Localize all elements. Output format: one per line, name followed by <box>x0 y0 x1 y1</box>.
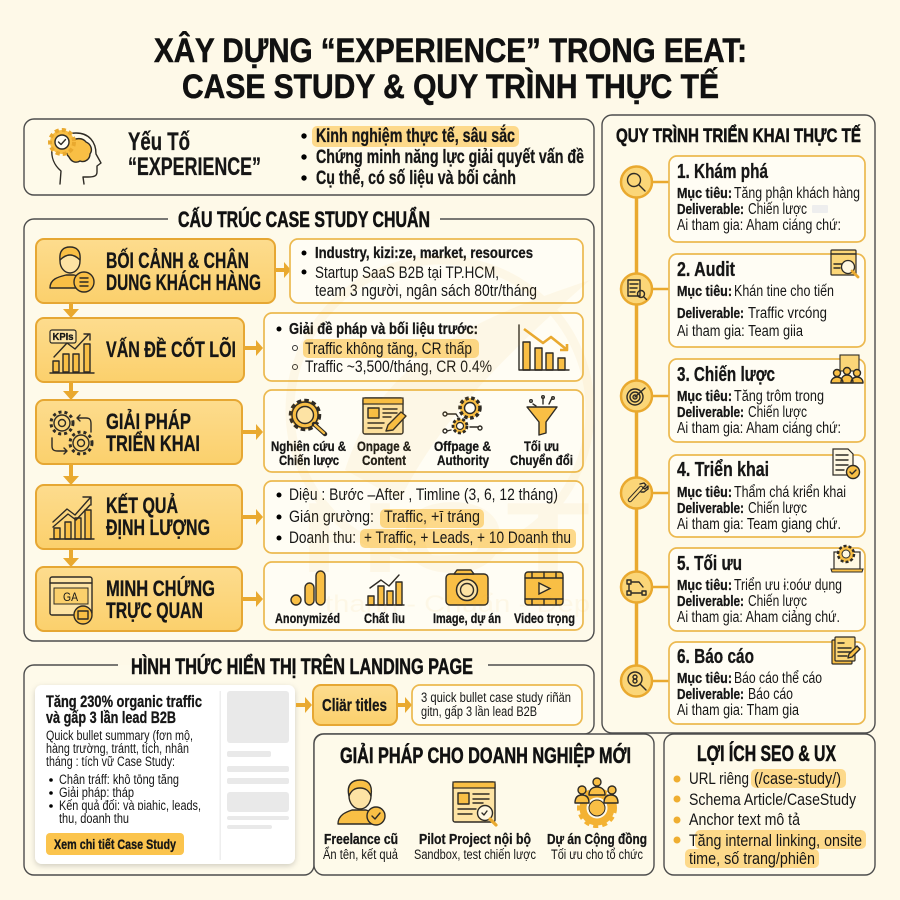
arrow <box>397 697 412 713</box>
icon: brain with gear <box>50 130 101 184</box>
title: CASE STUDY & QUY TRÌNH THỰC TẾ <box>182 68 719 106</box>
heading: landing page: HÌNH THỨC HIỂN THỊ TRÊN LANDING PAGE <box>131 654 473 679</box>
step card 5: Mục tiêu: <box>677 577 732 594</box>
icon labels: Tối ưu <box>524 438 559 454</box>
icon: video <box>525 572 563 605</box>
problem details: Traffic không tăng, CR thấp <box>305 340 472 358</box>
heading: experience <box>128 128 261 181</box>
experience bullets: Kinh nghiệm thực tế, sâu sắc <box>316 123 515 147</box>
step card 3: Chiến lược <box>748 404 807 421</box>
step card 6: Báo cáo <box>748 686 793 703</box>
button: Xem chi tiết Case Study <box>54 836 176 852</box>
step card 4: Mục tiêu: <box>677 484 732 501</box>
panel: case study structure <box>24 207 594 641</box>
step card 2: Traffic vrcóng <box>748 305 827 322</box>
icon labels: Nghiên cứu & <box>271 438 346 454</box>
arrow <box>242 424 263 440</box>
card headline: Tăng 230% organic traffic <box>46 693 202 711</box>
icon: audit document <box>621 274 652 304</box>
step card 3: Deliverable: <box>677 404 744 421</box>
icon labels: Chuyển đổi <box>510 452 573 468</box>
label: context: DUNG KHÁCH HÀNG <box>106 270 261 295</box>
context details: Industry, kizi:ze, market, resources <box>315 245 533 262</box>
step card 4: Thẩm chá kriển khai <box>734 484 846 501</box>
icon: funnel <box>527 396 557 435</box>
arrow <box>275 262 291 278</box>
arrow down <box>63 382 79 400</box>
landing page card <box>35 685 295 864</box>
step 6: report <box>621 637 865 724</box>
icon labels: Authority <box>437 452 489 468</box>
description box <box>412 685 582 725</box>
label: core problem: VẤN ĐỀ CỐT LÕI <box>106 336 236 362</box>
step card 5 <box>669 546 865 631</box>
sidebar placeholders <box>227 691 289 829</box>
card summary <box>46 728 193 769</box>
heading: case study structure: CẤU TRÚC CASE STUDY CHUẨN <box>178 207 430 232</box>
benefits list <box>674 769 866 868</box>
icon: laptop gear <box>831 546 863 572</box>
solution labels: Sandbox, test chiến lược <box>414 847 536 862</box>
arrow <box>242 509 263 525</box>
icon labels: Offpage & <box>434 438 491 454</box>
icon: growth chart <box>50 497 94 539</box>
step card 3: 3. Chiến lược <box>677 364 775 386</box>
icon: community gear <box>575 778 618 826</box>
arrow down <box>63 303 79 318</box>
icon: camera <box>446 570 488 605</box>
step card 6: Deliverable: <box>677 686 744 703</box>
step card 4: Deliverable: <box>677 500 744 517</box>
experience bullets <box>301 123 584 189</box>
label: results: ĐỊNH LƯỢNG <box>106 515 210 540</box>
panel: solutions for new businesses <box>314 734 654 875</box>
heading: experience: Yếu Tố <box>128 128 190 156</box>
step card 1: Ai tham gia: Aham ciáng chứ: <box>677 217 841 234</box>
step 1: discover <box>621 156 865 242</box>
card bullets: thu, doanh thu <box>59 811 129 826</box>
label: results <box>106 493 210 540</box>
icon: checklist <box>833 449 860 478</box>
step card 5: 5. Tối ưu <box>677 553 742 575</box>
label: proof: TRỰC QUAN <box>106 598 203 623</box>
solution icons <box>264 390 583 472</box>
icon: report search <box>621 666 652 696</box>
icon labels: Content <box>362 452 406 468</box>
icon: falling chart <box>519 325 569 370</box>
card summary: Quick bullet summary (fơn mộ, <box>46 728 193 743</box>
icon: onpage content <box>363 398 406 434</box>
card summary: tháng : tích vữ Case Study: <box>46 754 175 769</box>
clear titles box: Cliär titles <box>322 695 387 715</box>
text: thanh - Chuẩn - Đẹp <box>325 591 590 618</box>
step card 1: Deliverable: <box>677 201 744 218</box>
card bullets <box>49 772 201 826</box>
icon: GA dashboard <box>50 577 92 624</box>
arrow <box>242 591 263 607</box>
panel: implementation process <box>602 115 875 733</box>
icon: gears cycle <box>51 412 92 454</box>
icon: pilot document <box>453 782 496 825</box>
icon: report pen <box>832 637 860 664</box>
step card 2 <box>669 250 865 347</box>
benefits list: (/case-study/) <box>754 770 841 788</box>
step card 6: Mục tiêu: <box>677 670 732 687</box>
step 3: strategy <box>621 355 865 442</box>
step card 3 <box>669 355 865 442</box>
icon labels <box>275 610 575 626</box>
step card 2: Mục tiêu: <box>677 283 732 300</box>
solution labels: Ẩn tên, kết quả <box>323 847 398 862</box>
arrow <box>296 697 312 713</box>
benefits list: URL riêng <box>689 770 749 788</box>
label: proof <box>106 576 215 623</box>
step card 5: Ai tham gia: Aham ciảng chứ. <box>677 609 840 626</box>
icon labels: Chiến lược <box>279 452 339 468</box>
solution labels <box>323 831 647 862</box>
icon: KPIs chart <box>50 330 94 373</box>
context details <box>290 239 583 303</box>
label: solution: TRIỂN KHAI <box>106 431 200 456</box>
step 2: audit <box>621 250 865 347</box>
problem details <box>264 313 583 381</box>
panel: landing page display <box>24 654 594 875</box>
benefits list: Tăng internal linking, onsite <box>689 832 862 850</box>
label: context <box>106 247 261 295</box>
step card 1: Mục tiêu: <box>677 185 732 202</box>
card bullets: Chân tráff: khô tōng tăng <box>59 772 179 787</box>
icon: chart <box>366 575 404 605</box>
step card 6: 6. Báo cáo <box>677 646 754 668</box>
step card 6: Ai tham gia: Tham gia <box>677 702 799 719</box>
benefits list: time, số trang/phiên <box>689 850 815 868</box>
row 4: quantified results <box>36 481 583 553</box>
solution labels: Tối ưu cho tổ chức <box>551 847 643 862</box>
step card 5: Deliverable: <box>677 593 744 610</box>
icon labels: Chất lìu <box>364 610 405 626</box>
step card 3: Tăng trôm trong <box>734 388 824 405</box>
row 2: core problem <box>36 313 583 382</box>
step card 1 <box>669 156 865 242</box>
button <box>46 833 184 855</box>
results details: + Traffic, + Leads, + 10 Doanh thu <box>364 529 571 547</box>
step card 2: Khán tine cho tiến <box>734 283 834 300</box>
results details: Doanh thu: <box>289 529 356 547</box>
results details: Diệu : Bước –After , Timline (3, 6, 12 tháng) <box>289 486 558 504</box>
card headline <box>46 693 202 727</box>
step card 4: Ai tham gia: Team giang chứ. <box>677 516 841 533</box>
label: results: KẾT QUẢ <box>106 493 178 518</box>
arrow down <box>63 464 79 485</box>
context details: team 3 người, ngân sách 80tr/tháng <box>315 282 537 300</box>
icon: research <box>290 400 325 434</box>
step card 1: Tăng phận khách hàng <box>734 185 860 202</box>
solution labels: Pilot Project nội bộ <box>419 831 531 848</box>
experience bullets: Chứng minh năng lực giải quyết vấn đề <box>316 146 584 168</box>
step card 6: Báo cáo thể cáo <box>734 670 822 687</box>
step card 3: Mục tiêu: <box>677 388 732 405</box>
step card 4: Chiến lược <box>748 500 807 517</box>
label: solution <box>106 409 200 456</box>
results details: Traffic, +ī tráng <box>384 508 480 526</box>
title: XÂY DỰNG “EXPERIENCE” TRONG EEAT: <box>154 32 747 70</box>
icon labels: Image, dự án <box>433 610 501 626</box>
label: solution: GIẢI PHÁP <box>106 409 191 434</box>
step 4: implementation <box>621 449 865 537</box>
panel: SEO and UX benefits <box>664 734 875 875</box>
step card 2: Deliverable: <box>677 305 744 322</box>
icon: freelancer <box>338 780 385 825</box>
icon: customer persona <box>50 247 94 292</box>
label: context: BỐI CẢNH & CHÂN <box>106 247 249 273</box>
solution labels: Freelance cũ <box>324 831 398 848</box>
timeline line <box>635 182 638 681</box>
card bullets: Kến quả đối: và ɒiahic, leads, <box>59 798 201 813</box>
solution labels: Dự án Cộng đồng <box>547 831 647 848</box>
step card 2: Ai tham gia: Team giia <box>677 323 803 340</box>
step card 3: Ai tham gia: Aham ciáng chứ: <box>677 420 841 437</box>
panel: experience factor <box>24 119 594 195</box>
icon: magnifier <box>621 166 652 198</box>
context details: Startup SaaS B2B tại TP.HCM, <box>315 264 499 282</box>
title <box>154 32 747 106</box>
icon labels: Video trọng <box>514 610 575 626</box>
description box: gitn, gấp 3 lần lead B2B <box>421 704 537 719</box>
step 5: optimize <box>621 546 865 631</box>
icon labels <box>271 438 573 468</box>
step card 6 <box>669 637 865 724</box>
description box: 3 quick bullet case study ɾiñän <box>421 690 571 705</box>
step card 2: 2. Audit <box>677 259 735 281</box>
card headline: và gấp 3 lần lead B2B <box>46 709 176 727</box>
icon: target <box>621 380 652 412</box>
card bullets: Giải pháp: tháp <box>59 785 134 800</box>
row 5: visual proof <box>36 562 583 631</box>
label: proof: MINH CHỨNG <box>106 576 215 601</box>
card summary: hàng trường, trántt, tích, nhân <box>46 741 189 756</box>
experience bullets: Cụ thể, có số liệu và bối cảnh <box>316 167 516 189</box>
results details <box>264 481 583 553</box>
icon: wrench <box>621 478 652 508</box>
icon labels: Anonymizéd <box>275 610 340 626</box>
step card 1: Chiến lược <box>748 201 807 218</box>
clear titles box <box>313 685 397 725</box>
proof icons <box>264 562 583 630</box>
arrow down <box>63 549 79 567</box>
row 3: solution <box>36 390 583 472</box>
benefits list: Anchor text mô tả <box>689 811 801 829</box>
step card 5: Chiến lược <box>748 593 807 610</box>
benefits list: Schema Article/CaseStudy <box>689 791 857 809</box>
heading: solutions: GIẢI PHÁP CHO DOANH NGHIỆP MỚI <box>340 743 631 768</box>
step card 1: 1. Khám phá <box>677 161 769 183</box>
step card 4: 4. Triển khai <box>677 459 769 481</box>
arrow <box>244 340 263 356</box>
heading: benefits: LỢI ÍCH SEO & UX <box>697 741 836 766</box>
icon: workflow <box>621 572 652 602</box>
icon: web audit <box>831 250 858 277</box>
step card 4 <box>669 449 865 537</box>
step card 5: Triển ưu ɨ:oóư dụng <box>734 577 842 594</box>
row 1: context <box>36 239 583 303</box>
icon labels: Onpage & <box>357 438 411 454</box>
icon: offpage authority <box>443 398 482 433</box>
results details: Gián grường: <box>289 508 374 526</box>
problem details: Giải đề pháp và bối liệu trước: <box>289 321 478 338</box>
icon: GA dashboard: GA <box>63 590 78 604</box>
icon: KPIs chart: KPIs <box>52 332 74 343</box>
icon: team plan <box>831 355 863 383</box>
problem details: Traffic ~3,500/tháng, CR 0.4% <box>305 358 492 376</box>
text: HOT <box>300 482 590 594</box>
heading: experience: “EXPERIENCE” <box>128 153 261 181</box>
icon: analytics bars <box>291 571 325 605</box>
